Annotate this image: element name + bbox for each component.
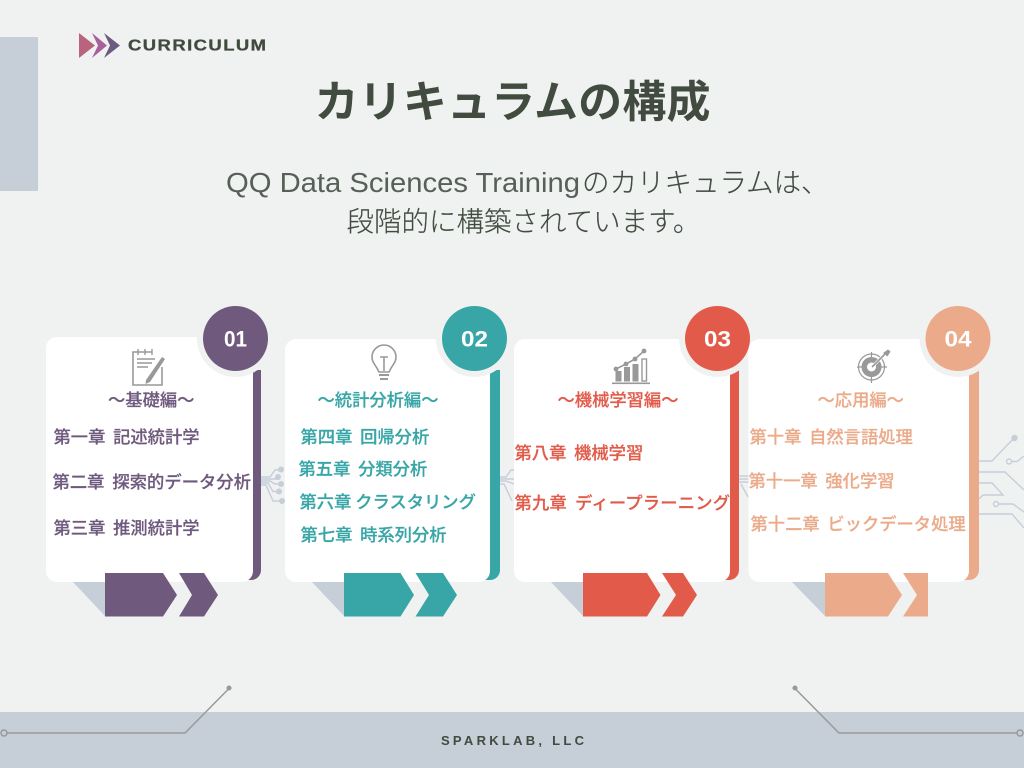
footer text: SPARKLAB, LLC (441, 733, 585, 748)
subtitle: のカリキュラムは、 (582, 160, 829, 200)
fold shadow 1 (73, 582, 105, 616)
subtitle: QQ Data Sciences Training (226, 167, 580, 198)
chapter list 2: 第四章 回帰分析 (300, 423, 429, 448)
panel: card 3 (514, 300, 756, 616)
title: カリキュラムの構成 (314, 66, 710, 130)
chapter list 4: 第十二章 ビックデータ処理 (750, 510, 966, 535)
panel: card 4 (748, 300, 996, 616)
card body 3 (514, 339, 730, 582)
heading 3: ～機械学習編～ (558, 386, 678, 411)
chapter list 2: 第七章 時系列分析 (300, 521, 447, 546)
fold shadow 3 (551, 582, 583, 616)
circuit decoration: between cards 2 and 3 (500, 470, 514, 501)
badge 3: 03 (704, 326, 731, 352)
fold shadow 2 (312, 582, 344, 616)
badge 2 (436, 300, 513, 377)
icon: triple arrows (79, 33, 120, 58)
chapter list 4: 第十一章 強化学習 (748, 467, 895, 492)
card body 1 (46, 337, 253, 582)
circuit decoration: between cards 1 and 2 (261, 466, 285, 504)
chapter list 2: 第五章 分類分析 (298, 455, 427, 480)
circuit decoration: between cards 3 and 4 (739, 476, 749, 497)
chevron arrow 4 (825, 573, 928, 616)
chapter list 2: 第六章 クラスタリング (300, 488, 476, 513)
badge 1: 01 (224, 326, 247, 352)
side bar 2 (482, 370, 500, 580)
heading 4: ～応用編～ (818, 386, 904, 411)
circuit line: left (1, 686, 231, 736)
circuit line: right (793, 686, 1023, 736)
left accent block (0, 37, 38, 191)
icon: target with dart (857, 350, 890, 383)
badge 4 (920, 300, 996, 377)
badge 3 (679, 300, 756, 377)
chevron arrow 2 (344, 573, 457, 616)
chevron arrow 3 (583, 573, 697, 616)
chapter list 3 (514, 439, 730, 514)
chapter list 4: 第十章 自然言語処理 (750, 423, 913, 448)
card body 4 (748, 339, 969, 582)
icon: notepad (133, 349, 165, 385)
chapter list 4 (748, 423, 966, 535)
side bar 3 (722, 370, 739, 580)
chapter list 1: 第二章 探索的データ分析 (52, 468, 251, 493)
heading 1: ～基礎編～ (108, 386, 194, 411)
subtitle (226, 160, 829, 239)
side bar 1 (245, 370, 261, 580)
chapter list 2 (298, 423, 476, 546)
chapter list 3: 第八章 機械学習 (514, 439, 643, 464)
badge 2: 02 (461, 326, 488, 352)
side bar 4 (960, 370, 979, 580)
chapter list 1: 第三章 推測統計学 (54, 514, 200, 539)
badge 1 (197, 300, 274, 377)
heading 2: ～統計分析編～ (318, 386, 438, 411)
circuit decoration: right (979, 436, 1024, 528)
subtitle: 段階的に構築されています。 (346, 199, 700, 239)
fold shadow 4 (792, 582, 825, 616)
chevron arrow 1 (105, 573, 218, 616)
section tag: CURRICULUM (128, 38, 268, 54)
footer bar (0, 712, 1024, 768)
icon: light bulb (372, 345, 396, 379)
chapter list 1: 第一章 記述統計学 (54, 423, 200, 448)
icon: growth chart (612, 349, 650, 384)
badge 4: 04 (944, 326, 972, 352)
chapter list 3: 第九章 ディープラーニング (514, 489, 730, 514)
panel: card 2 (285, 300, 513, 616)
panel: card 1 (46, 300, 274, 616)
card body 2 (285, 339, 490, 582)
chapter list 1 (52, 423, 251, 539)
